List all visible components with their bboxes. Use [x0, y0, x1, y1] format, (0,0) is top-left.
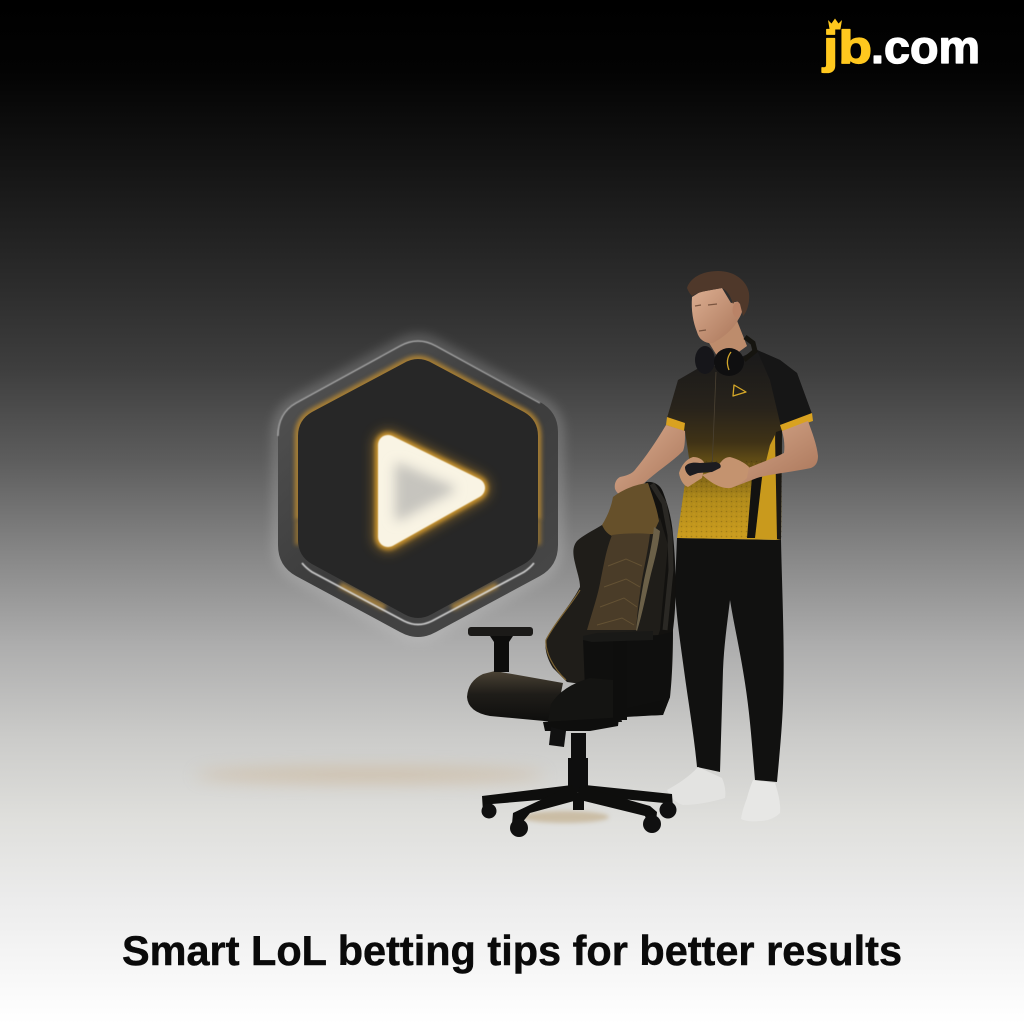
ear cup ring: [727, 352, 731, 370]
headband: [744, 337, 755, 360]
floor shadow: [521, 811, 609, 823]
hexagon play badge: [278, 340, 558, 637]
right shoe: [741, 780, 780, 821]
eyebrow and mouth: [695, 304, 717, 331]
chest logo: [733, 385, 746, 396]
right hand: [702, 457, 749, 488]
yellow cuff right: [780, 413, 813, 431]
chair side trim: [636, 527, 660, 631]
back-left leg: [482, 785, 575, 812]
logo: jb.com: [822, 18, 980, 73]
left ear cup: [695, 346, 715, 374]
headphones: [695, 337, 755, 376]
chair center panel: [587, 533, 650, 630]
front-left leg: [512, 786, 585, 824]
far armrest pad: [468, 627, 533, 636]
logo wordmark: .com: [871, 21, 980, 73]
gas cylinder: [568, 733, 588, 792]
base stub: [573, 795, 584, 810]
badge amber inner glow: [298, 359, 538, 608]
hair: [687, 271, 749, 316]
badge lower bevel highlight: [302, 563, 534, 624]
person: [615, 271, 818, 821]
right ear cup: [714, 348, 744, 376]
jersey: [667, 350, 812, 540]
right arm: [712, 421, 818, 488]
logo crown: [828, 18, 842, 30]
seat side shell: [548, 678, 622, 722]
left arm: [615, 425, 685, 497]
ear: [732, 302, 742, 318]
caster: [643, 815, 661, 833]
floor glow: [195, 767, 545, 783]
badge top highlight: [278, 341, 540, 436]
back-right leg: [585, 785, 673, 808]
logo wordmark: jb: [822, 21, 872, 73]
jersey upper right dark: [757, 350, 812, 431]
jersey side black strip: [772, 430, 782, 540]
play icon rim: [388, 445, 475, 537]
badge inner panel: [298, 359, 538, 618]
bolster trim: [546, 590, 580, 680]
caster: [482, 804, 496, 818]
far armrest post: [490, 636, 513, 672]
left shoe: [667, 767, 725, 805]
title: Smart LoL betting tips for better results: [122, 927, 902, 974]
play icon centre shading: [398, 466, 452, 518]
yellow cuff left: [666, 417, 685, 431]
seat cushion: [467, 671, 563, 722]
badge halo: [278, 340, 558, 637]
caster: [510, 819, 528, 837]
trousers: [675, 538, 784, 782]
chair headrest tan: [602, 483, 659, 536]
badge outer frame: [278, 340, 558, 637]
front-right leg: [576, 786, 657, 822]
caster: [660, 802, 676, 818]
logo wordmark: [822, 21, 980, 73]
height lever: [549, 727, 566, 747]
jersey texture: [677, 460, 782, 538]
face: [692, 288, 743, 343]
lumbar section: [583, 632, 672, 716]
star base: [482, 785, 673, 824]
jersey placket: [712, 372, 716, 470]
neck: [706, 318, 747, 364]
jersey side gold panel: [755, 435, 777, 539]
left hand: [679, 457, 705, 487]
game controller: [685, 462, 721, 476]
chair back right rim: [652, 484, 671, 630]
near armrest pad: [583, 631, 653, 642]
near armrest post: [613, 640, 627, 720]
jersey black stripe: [747, 477, 762, 538]
mechanism: [543, 700, 664, 731]
gaming chair: [467, 482, 676, 837]
play icon: [388, 445, 475, 537]
play icon glow: [388, 445, 475, 537]
chevrons: [597, 559, 642, 625]
chair bolster: [545, 518, 668, 692]
chair back shell: [630, 482, 676, 716]
